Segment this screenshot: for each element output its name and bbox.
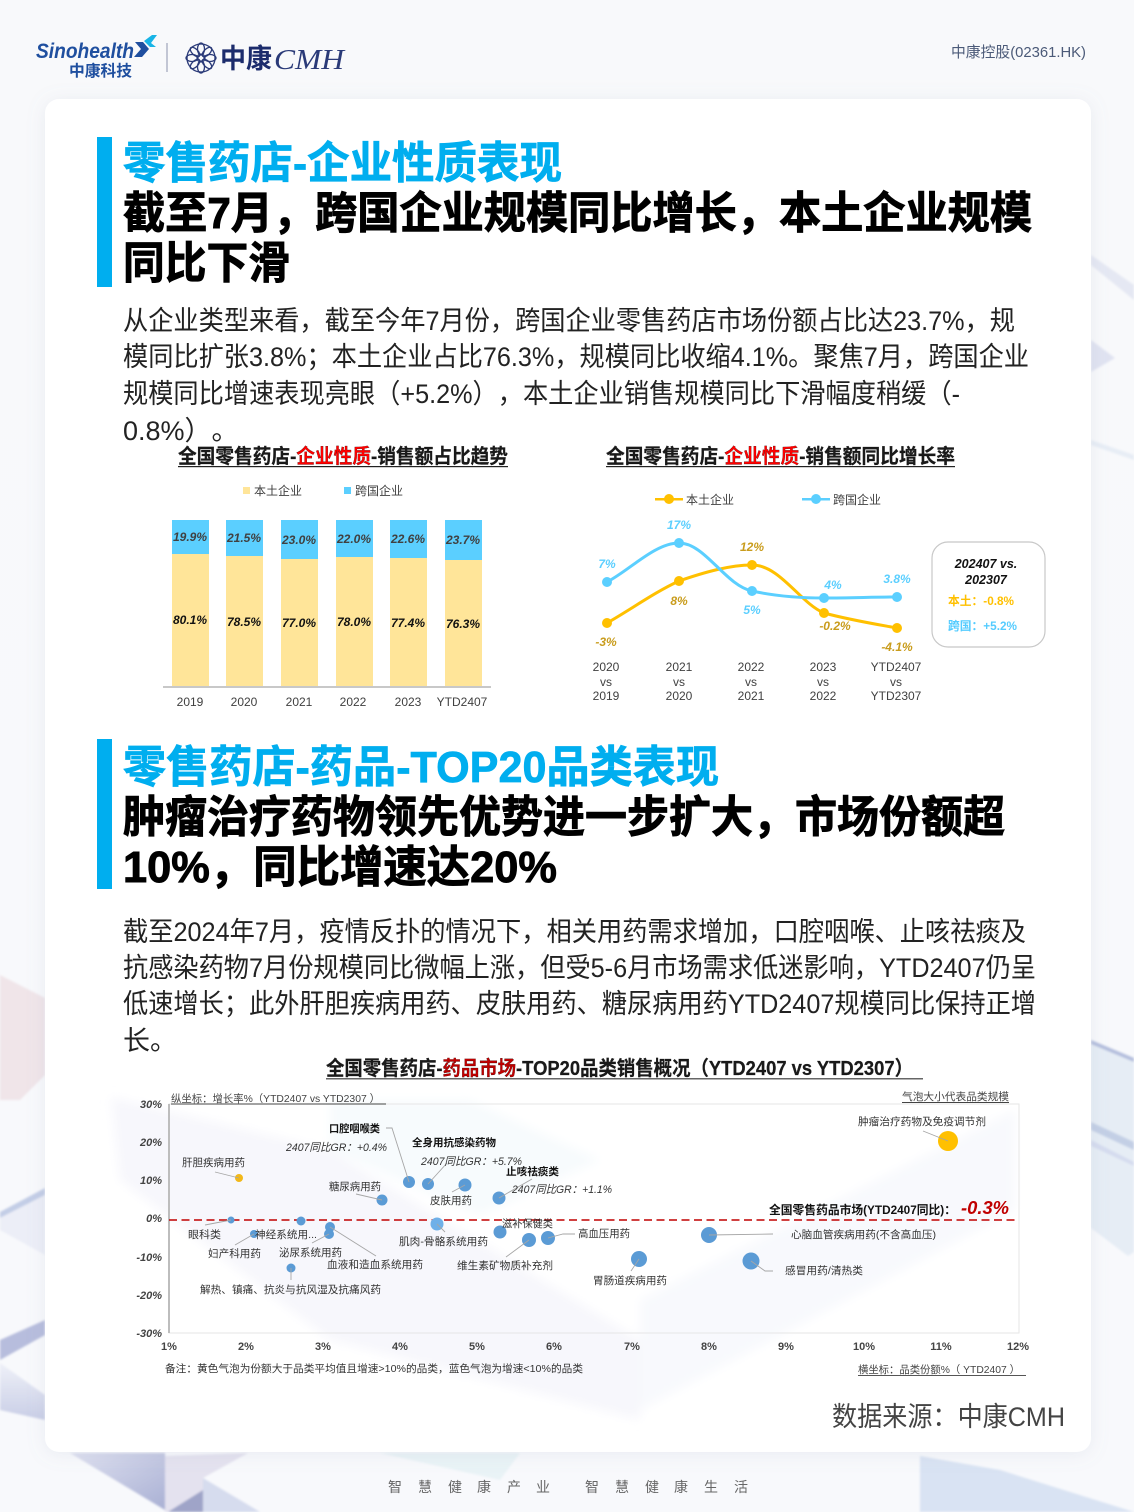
footer slogan: 活 (734, 1479, 748, 1495)
logo: Sinohealth: 中康科技 (69, 61, 132, 80)
line chart: 3.8% (883, 572, 911, 586)
bubble labels: 心脑血管疾病用药(不含高血压) (791, 1228, 936, 1241)
section 2 body text (123, 917, 1036, 1056)
callout: 202407 vs 202307: 本土：-0.8% (948, 593, 1014, 608)
axis tick labels: 3% (315, 1341, 331, 1353)
bubble chart (136, 1090, 1029, 1376)
line chart: -3% (595, 635, 617, 649)
bubble labels: 神经系统用... (255, 1228, 317, 1241)
stacked bar chart: 22.6% (390, 532, 425, 546)
callout: 202407 vs 202307: 202307 (964, 573, 1008, 587)
chart footnote: 备注：黄色气泡为份额大于品类平均值且增速>10%的品类，蓝色气泡为增速<10%的品类 (165, 1362, 584, 1375)
bubble labels: 肿瘤治疗药物及免疫调节剂 (858, 1115, 986, 1128)
section 2 heading: 10%，同比增速达20% (123, 843, 557, 892)
axis notes: 气泡大小代表品类规模 (902, 1090, 1010, 1103)
line chart: -0.2% (819, 619, 851, 633)
bubble labels: 高血压用药 (578, 1227, 630, 1240)
axis tick labels: -20% (136, 1290, 162, 1302)
legend: share chart: 跨国企业 (355, 483, 403, 498)
axis tick labels: 10% (140, 1175, 162, 1187)
line chart: YTD2407 (871, 660, 922, 674)
section 1 body text: 从企业类型来看，截至今年7月份，跨国企业零售药店市场份额占比达23.7%，规 (123, 306, 1015, 336)
stacked bar chart: 80.1% (173, 613, 207, 627)
axis tick labels: 6% (546, 1341, 562, 1353)
bubble labels: 2407同比GR：+5.7% (420, 1155, 522, 1168)
axis tick labels (136, 1099, 1029, 1353)
legend: share chart: 本土企业 (254, 483, 302, 498)
footer slogan (388, 1479, 748, 1495)
section 1 heading: 截至7月，跨国企业规模同比增长，本土企业规模 (123, 189, 1032, 238)
logo: CMH: CMH (274, 44, 346, 76)
footer slogan: 慧 (615, 1479, 629, 1495)
bubble labels: 胃肠道疾病用药 (593, 1274, 667, 1287)
legend: line chart: 跨国企业 (833, 492, 881, 507)
bubble labels: 妇产科用药 (208, 1247, 261, 1260)
bubble labels: 感冒用药/清热类 (785, 1264, 864, 1277)
stock code: 中康控股(02361.HK) (951, 44, 1086, 61)
stacked bar chart: 2023 (395, 695, 422, 709)
axis notes: 横坐标：品类份额%（ YTD2407 ） (858, 1363, 1020, 1376)
stacked bar chart: 2021 (286, 695, 313, 709)
axis tick labels: 12% (1007, 1341, 1029, 1353)
line chart: -4.1% (881, 640, 913, 654)
logo: CMH (186, 43, 346, 76)
section 1 body text: 0.8%）。 (123, 416, 239, 446)
logo divider (166, 43, 168, 72)
footer slogan: 智 (388, 1479, 402, 1495)
legend: share chart (243, 483, 403, 498)
line chart: 2021 (738, 689, 765, 703)
callout: 202407 vs 202307: 跨国：+5.2% (948, 619, 1017, 633)
line chart: 2019 (593, 689, 620, 703)
axis tick labels: -10% (136, 1252, 162, 1264)
footer slogan: 康 (674, 1479, 688, 1495)
footer slogan: 智 (585, 1479, 599, 1495)
footer slogan: 康 (477, 1479, 491, 1495)
chart title: share trend: 全国零售药店-企业性质-销售额占比趋势 (178, 444, 508, 468)
bubble labels: 滋补保健类 (502, 1217, 553, 1230)
bubble labels: 泌尿系统用药 (279, 1246, 342, 1259)
stacked bar chart: 23.0% (281, 533, 316, 547)
line chart: vs (673, 675, 685, 689)
logo: CMH: 中康 (220, 44, 272, 74)
axis tick labels: -30% (136, 1328, 162, 1340)
leader lines (205, 1128, 948, 1280)
market benchmark label (769, 1198, 1009, 1218)
callout: 202407 vs 202307 (932, 542, 1045, 647)
stacked bar chart: 23.7% (445, 533, 480, 547)
bubble labels: 2407同比GR：+1.1% (511, 1183, 612, 1196)
line chart: vs (890, 675, 902, 689)
legend: line chart (655, 492, 881, 507)
section 2 body text: 截至2024年7月，疫情反扑的情况下，相关用药需求增加，口腔咽喉、止咳祛痰及 (123, 917, 1026, 947)
line chart: 2022 (738, 660, 765, 674)
stacked bar chart (163, 483, 491, 709)
section 2 body text: 长。 (123, 1026, 177, 1056)
axis tick labels: 20% (139, 1137, 162, 1149)
chart title: growth rate: 全国零售药店-企业性质-销售额同比增长率 (606, 444, 955, 468)
line chart: vs (817, 675, 829, 689)
section 1 body text (123, 306, 1029, 446)
bubble labels: 口腔咽喉类 (329, 1122, 380, 1135)
bubbles (228, 1131, 958, 1272)
chart title: TOP20 categories: 全国零售药店-药品市场-TOP20品类销售概况（YTD2407 vs YTD2307） (326, 1056, 913, 1080)
stacked bar chart: 22.0% (336, 532, 371, 546)
axis tick labels: 4% (392, 1341, 408, 1353)
stacked bar chart: YTD2407 (437, 695, 488, 709)
bubble labels: 全身用抗感染药物 (412, 1136, 496, 1149)
line chart: 2020 (593, 660, 620, 674)
axis tick labels: 5% (469, 1341, 485, 1353)
bubble labels: 糖尿病用药 (329, 1180, 381, 1193)
stacked bar chart: 77.4% (391, 616, 425, 630)
callout: 202407 vs 202307: 202407 vs. (954, 557, 1017, 571)
stacked bar chart: 21.5% (226, 531, 261, 545)
section 2 body text: 抗感染药物7月份规模同比微幅上涨，但受5-6月市场需求低迷影响，YTD2407仍呈 (123, 953, 1036, 983)
axis tick labels: 0% (146, 1213, 162, 1225)
section 1 heading: 同比下滑 (123, 239, 290, 288)
line chart: YTD2307 (871, 689, 922, 703)
section 1 body text: 模同比扩张3.8%；本土企业占比76.3%，规模同比收缩4.1%。聚焦7月，跨国企业 (123, 342, 1029, 372)
logo: Sinohealth (36, 35, 157, 80)
bubble labels: 皮肤用药 (430, 1194, 472, 1207)
line chart: vs (600, 675, 612, 689)
bubble labels: 维生素矿物质补充剂 (457, 1259, 553, 1272)
stacked bar chart: 2019 (177, 695, 204, 709)
market benchmark label: 全国零售药品市场(YTD2407同比)： (769, 1202, 956, 1217)
stacked bar chart: 19.9% (173, 530, 207, 544)
stacked bar chart: 2020 (231, 695, 258, 709)
line chart: 4% (823, 578, 842, 592)
axis tick labels: 9% (778, 1341, 794, 1353)
logo: Sinohealth: Sinohealth (36, 40, 134, 63)
stacked bar chart: 78.0% (337, 615, 371, 629)
axis tick labels: 2% (238, 1341, 254, 1353)
axis tick labels: 1% (161, 1341, 177, 1353)
market benchmark label: -0.3% (961, 1198, 1009, 1218)
axis tick labels: 8% (701, 1341, 717, 1353)
section 1 heading: 零售药店-企业性质表现 (123, 139, 562, 188)
section 2 body text: 低速增长；此外肝胆疾病用药、皮肤用药、糖尿病用药YTD2407规模同比保持正增 (123, 989, 1036, 1019)
section 2 heading (97, 739, 1005, 892)
bubble labels: 血液和造血系统用药 (327, 1258, 423, 1271)
legend: line chart: 本土企业 (686, 492, 734, 507)
axis notes (171, 1090, 1026, 1376)
bubble labels (182, 1115, 986, 1296)
footer slogan: 生 (704, 1479, 718, 1495)
stacked bar chart: 2022 (340, 695, 367, 709)
footer slogan: 健 (448, 1479, 462, 1495)
stacked bar chart: 76.3% (446, 617, 480, 631)
axis tick labels: 7% (624, 1341, 640, 1353)
bubble labels: 肝胆疾病用药 (182, 1156, 245, 1169)
line chart: 2020 (666, 689, 693, 703)
section 2 heading: 肿瘤治疗药物领先优势进一步扩大，市场份额超 (123, 793, 1005, 842)
line chart: 2021 (666, 660, 693, 674)
bubble labels: 解热、镇痛、抗炎与抗风湿及抗痛风药 (200, 1283, 381, 1296)
footer slogan: 产 (507, 1479, 521, 1495)
stacked bar chart: 77.0% (282, 616, 316, 630)
data source: 数据来源：中康CMH (832, 1402, 1065, 1432)
section 2 heading: 零售药店-药品-TOP20品类表现 (123, 743, 719, 792)
line chart: 2023 (810, 660, 837, 674)
bubble labels: 眼科类 (188, 1228, 222, 1241)
line chart: 2022 (810, 689, 837, 703)
line chart: 5% (743, 603, 761, 617)
stacked bar chart: 78.5% (227, 615, 261, 629)
line chart: 17% (667, 518, 691, 532)
line chart: 12% (740, 540, 764, 554)
footer slogan: 业 (536, 1479, 550, 1495)
bubble labels: 2407同比GR：+0.4% (285, 1141, 387, 1154)
bubble labels: 肌肉-骨骼系统用药 (399, 1235, 488, 1248)
bubble labels: 止咳祛痰类 (506, 1165, 560, 1178)
footer slogan: 慧 (418, 1479, 432, 1495)
line chart: 7% (598, 557, 616, 571)
line chart: vs (745, 675, 757, 689)
line chart (593, 492, 922, 703)
axis notes: 纵坐标：增长率%（YTD2407 vs YTD2307 ） (171, 1092, 380, 1105)
section 1 heading (97, 137, 1032, 288)
axis tick labels: 10% (853, 1341, 875, 1353)
axis tick labels: 11% (930, 1341, 952, 1353)
section 1 body text: 规模同比增速表现亮眼（+5.2%），本土企业销售规模同比下滑幅度稍缓（- (123, 379, 960, 409)
axis tick labels: 30% (140, 1099, 162, 1111)
line chart: 8% (670, 594, 688, 608)
footer slogan: 健 (645, 1479, 659, 1495)
